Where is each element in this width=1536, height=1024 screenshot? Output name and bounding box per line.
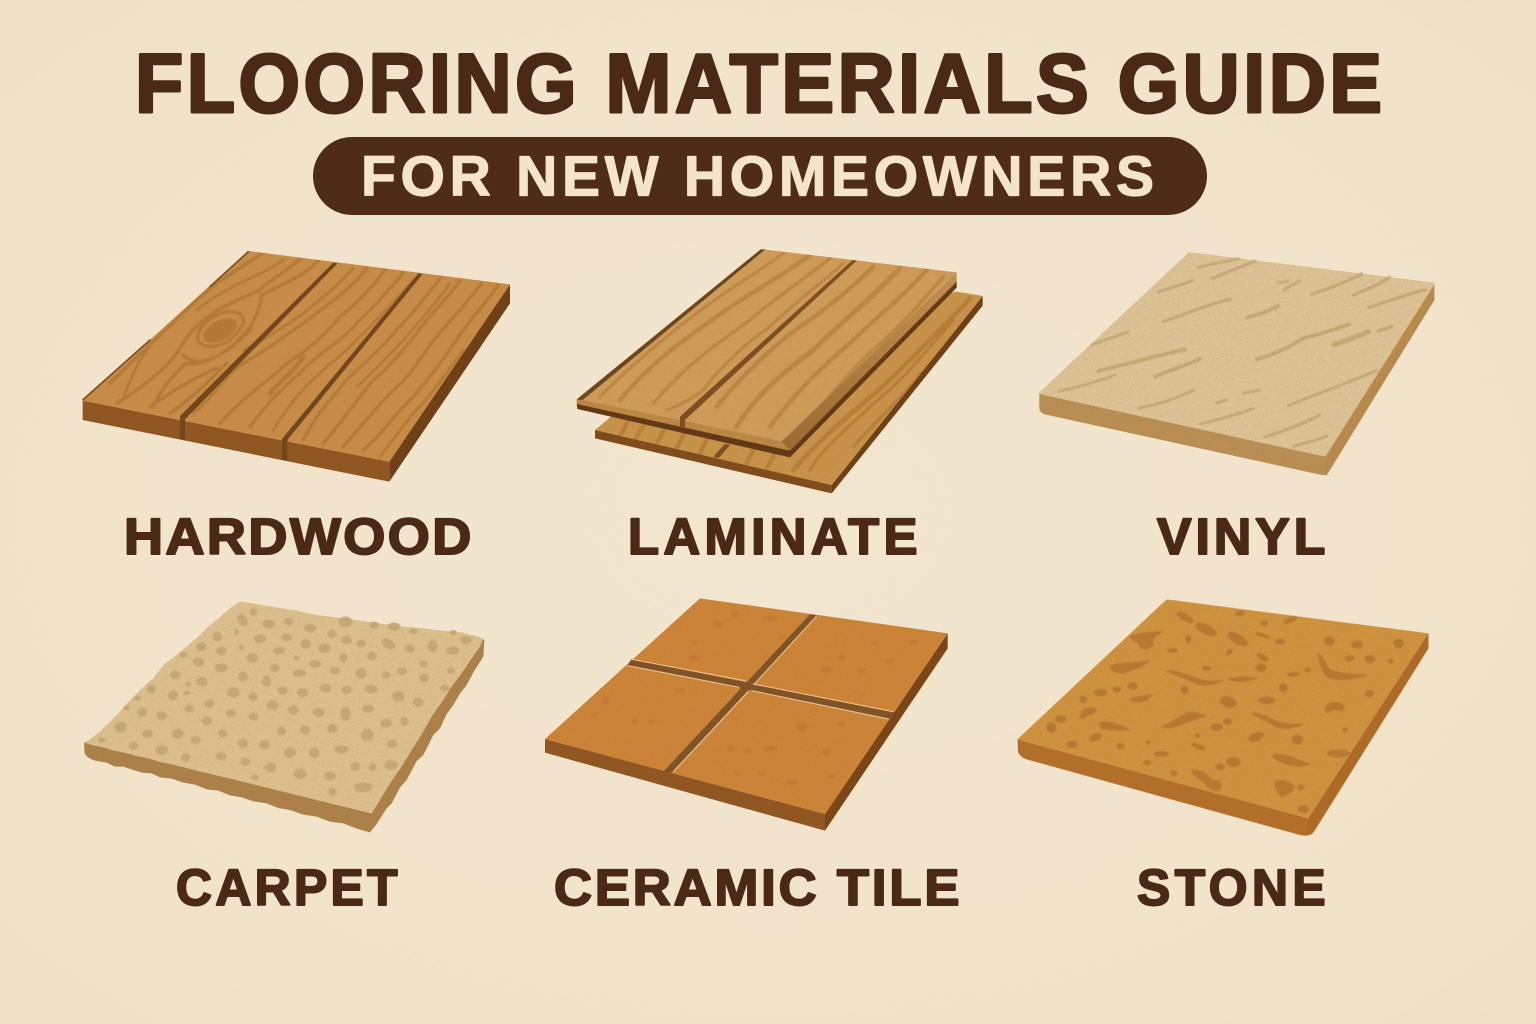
hardwood plank sample bbox=[83, 251, 510, 482]
panel: laminate bbox=[577, 249, 983, 565]
hardwood label: HARDWOOD bbox=[124, 509, 471, 566]
stone label: STONE bbox=[1137, 859, 1326, 916]
ceramic tile label: CERAMIC TILE bbox=[554, 859, 959, 916]
vinyl label: VINYL bbox=[1157, 508, 1325, 565]
subtitle text: FOR NEW HOMEOWNERS bbox=[361, 144, 1154, 208]
ceramic tile sample bbox=[545, 598, 948, 831]
carpet label: CARPET bbox=[176, 859, 398, 916]
laminate label: LAMINATE bbox=[628, 508, 917, 565]
title: FLOORING MATERIALS GUIDE bbox=[135, 37, 1382, 131]
carpet slab sample bbox=[84, 602, 484, 832]
panel: carpet bbox=[84, 602, 484, 916]
laminate stacked boards sample bbox=[577, 249, 983, 493]
subtitle pill bbox=[313, 137, 1207, 215]
stone slab sample bbox=[1017, 599, 1428, 836]
panel: vinyl bbox=[1039, 253, 1434, 565]
vinyl slab sample bbox=[1039, 253, 1434, 475]
infographic canvas bbox=[82, 52, 1434, 906]
panel: hardwood bbox=[83, 251, 510, 566]
panel: ceramic tile bbox=[545, 598, 959, 916]
panel: stone bbox=[1017, 599, 1428, 916]
